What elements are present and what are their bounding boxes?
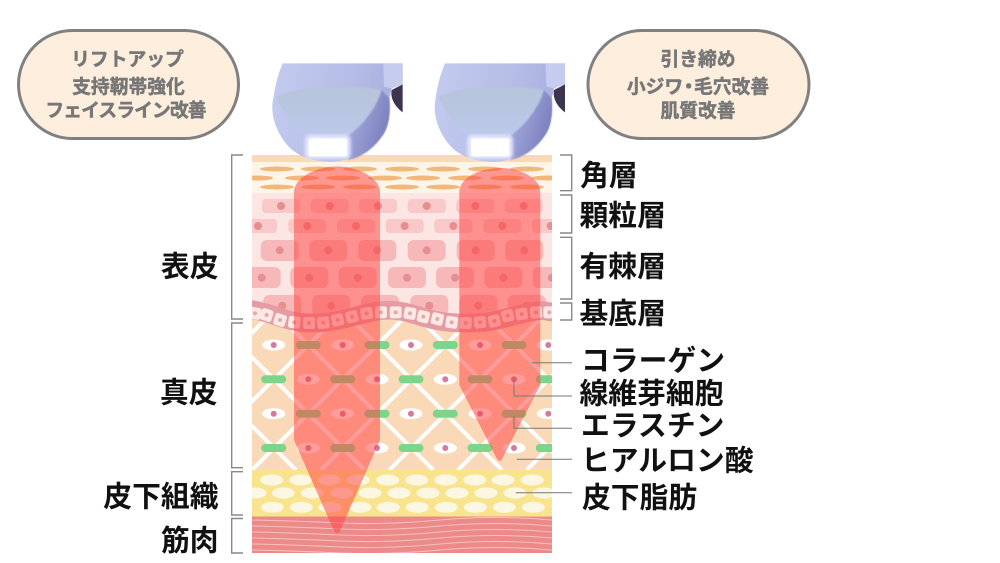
pill: tightening effects: 小ジワ・毛穴改善 [627,76,769,97]
left layer labels: 表皮 [161,252,218,284]
right epidermis labels: 有棘層 [580,252,666,284]
device head right [435,63,565,162]
pill: lifting effects: フェイスライン改善 [45,100,206,120]
left layer labels: 真皮 [160,378,218,410]
basal layer wave [248,306,555,329]
muscle layer [252,516,552,554]
pill: tightening effects: 引き締め [660,48,736,70]
right epidermis labels: 顆粒層 [580,200,666,232]
right component labels: ヒアルロン酸 [581,446,754,478]
left layer labels: 皮下組織 [103,482,219,514]
pill: tightening effects [588,30,809,138]
left layer labels: 筋肉 [161,526,218,558]
right epidermis labels: 角層 [580,160,638,192]
stratum corneum layer [243,155,565,193]
right brackets [560,155,572,320]
shallow energy beam [459,168,540,461]
right epidermis labels [580,160,666,330]
deep energy beam [294,166,380,533]
pill: lifting effects: リフトアップ [71,48,184,70]
pill: lifting effects: 支持靭帯強化 [72,76,185,97]
left brackets [232,155,243,553]
pill: lifting effects [18,30,238,138]
device head left [272,63,403,162]
right component labels: エラスチン [581,410,724,442]
pill: tightening effects: 肌質改善 [660,100,736,121]
right component labels: 皮下脂肪 [582,482,697,514]
right component labels: 線維芽細胞 [580,378,724,410]
skin cross-section [252,155,552,553]
epidermis cell layers [252,193,552,314]
dermis layer with collagen lattice [252,319,552,470]
leader lines [514,363,572,493]
right component labels: コラーゲン [581,346,725,378]
right epidermis labels: 基底層 [580,298,666,330]
subcutaneous fat layer [244,470,556,516]
right component labels [580,346,754,514]
left layer labels [103,252,219,558]
